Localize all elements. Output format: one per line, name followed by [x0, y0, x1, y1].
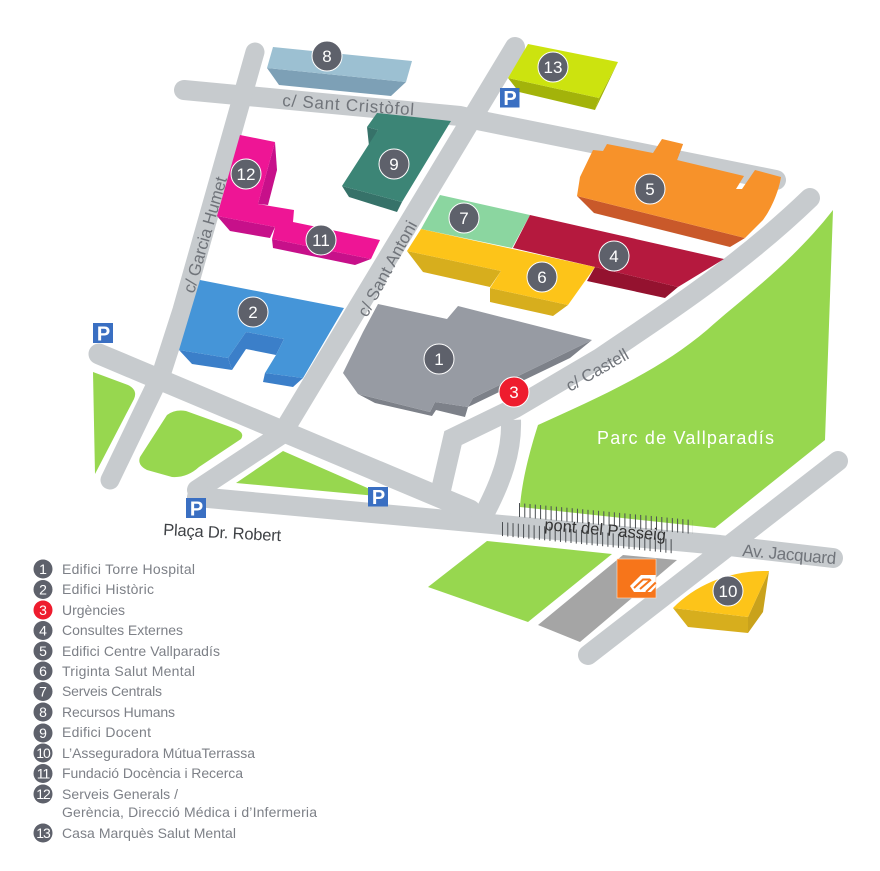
- green area: plaza triangle: [236, 451, 388, 497]
- map markers: 4: [609, 247, 619, 266]
- legend: Edifici Docent: [62, 724, 151, 740]
- parking icon plaça: P: [190, 498, 203, 520]
- legend: Edifici Torre Hospital: [62, 561, 195, 577]
- map markers: 8: [322, 47, 332, 66]
- legend: Edifici Centre Vallparadís: [62, 643, 220, 659]
- building 1: [343, 304, 592, 417]
- legend: 8: [39, 704, 47, 720]
- legend: [34, 560, 317, 842]
- green area: lower: [428, 541, 612, 622]
- building 7: [421, 195, 530, 248]
- map markers: 6: [537, 268, 547, 287]
- buildings 11 and 12: [217, 135, 380, 265]
- metro icon: [617, 559, 656, 598]
- legend: 6: [39, 663, 47, 679]
- street name: c/ Garcia Humet: c/ Garcia Humet: [180, 174, 231, 295]
- building 6: [407, 229, 595, 316]
- map markers: 10: [719, 582, 737, 601]
- map markers: 2: [248, 303, 258, 322]
- legend: L’Asseguradora MútuaTerrassa: [62, 745, 255, 761]
- building 13: [508, 44, 618, 110]
- map markers: 5: [645, 180, 655, 199]
- legend: Casa Marquès Salut Mental: [62, 825, 236, 841]
- legend: 2: [39, 582, 47, 598]
- green area: rounded: [139, 410, 242, 477]
- legend: Triginta Salut Mental: [62, 663, 195, 679]
- legend: 13: [36, 825, 51, 841]
- map markers: 9: [389, 155, 399, 174]
- legend: Recursos Humans: [62, 704, 175, 720]
- legend: Serveis Generals /: [62, 786, 178, 802]
- building 8: [267, 47, 412, 96]
- parking icon west: P: [97, 324, 110, 346]
- legend: Gerència, Direcció Médica i d’Infermeria: [62, 804, 317, 820]
- parking icon south: P: [372, 487, 385, 509]
- legend: 7: [39, 684, 47, 700]
- map markers: 3: [509, 383, 519, 402]
- legend: Fundació Docència i Recerca: [62, 765, 243, 781]
- legend: 1: [39, 561, 47, 577]
- map markers: 13: [544, 58, 562, 77]
- parking icon west: [93, 323, 113, 346]
- street name: Av. Jacquard: Av. Jacquard: [742, 541, 837, 568]
- legend: 10: [36, 745, 51, 761]
- street name: c/ Sant Cristòfol: c/ Sant Cristòfol: [282, 91, 415, 119]
- map markers: 11: [312, 231, 330, 250]
- building 10: [673, 571, 769, 633]
- legend: Serveis Centrals: [62, 683, 162, 699]
- building 5: [577, 139, 781, 247]
- legend: 11: [37, 766, 50, 782]
- parking lot: [538, 555, 677, 642]
- legend: 5: [39, 643, 47, 659]
- building 9: [342, 113, 451, 212]
- street network: [99, 47, 838, 655]
- green area: left triangle: [93, 372, 135, 474]
- label: pont del Passeig: pont del Passeig: [544, 516, 667, 545]
- legend: Edifici Històric: [62, 581, 154, 597]
- legend: 3: [39, 602, 47, 618]
- parking icon north: [500, 88, 520, 110]
- parking icon plaça: [186, 498, 206, 520]
- parking icon south: [368, 487, 388, 509]
- legend: 9: [39, 725, 47, 741]
- map markers: [231, 41, 743, 606]
- bridge hatching: [502, 510, 693, 547]
- legend: Consultes Externes: [62, 622, 183, 638]
- legend: 4: [39, 622, 47, 638]
- map markers: 7: [459, 209, 469, 228]
- map markers: 1: [434, 350, 444, 369]
- building 4: [513, 215, 724, 298]
- park: Parc de Vallparadís: [520, 210, 833, 528]
- legend: 12: [36, 786, 51, 802]
- label: Plaça Dr. Robert: Plaça Dr. Robert: [163, 521, 282, 545]
- parking icon north: P: [503, 88, 517, 110]
- street name: c/ Castell: c/ Castell: [563, 345, 632, 395]
- legend: Urgències: [62, 602, 125, 618]
- building 2: [179, 280, 344, 387]
- street name: c/ Sant Antoni: c/ Sant Antoni: [354, 218, 421, 320]
- map markers: 12: [237, 165, 255, 184]
- park label: Parc de Vallparadís: [597, 428, 774, 448]
